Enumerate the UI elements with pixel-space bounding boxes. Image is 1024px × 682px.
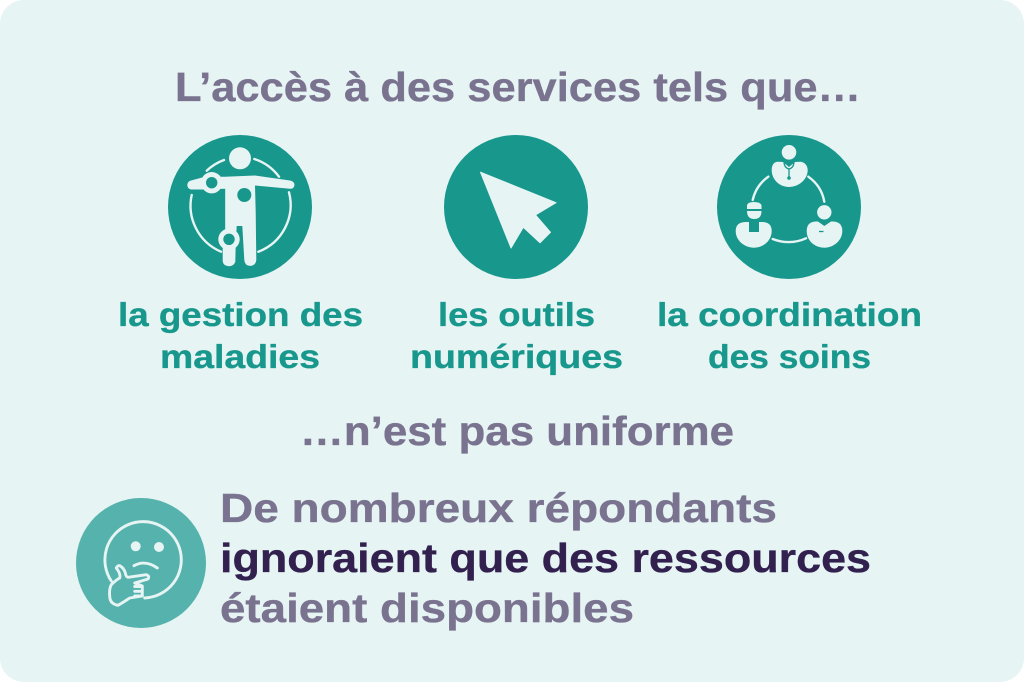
label: care coordination — [657, 296, 922, 375]
label: care coordination: des soins — [708, 338, 871, 375]
text block: respondents unaware: De nombreux répondants — [220, 485, 777, 531]
subheading: …n’est pas uniforme — [300, 408, 734, 454]
text block: respondents unaware: ignoraient que des ressources — [220, 535, 871, 581]
icon: thinking face — [76, 498, 206, 628]
icon: cursor — [444, 135, 588, 279]
label: disease management — [118, 296, 363, 375]
label: care coordination: la coordination — [657, 296, 922, 333]
label: digital tools — [410, 296, 623, 375]
label: disease management: la gestion des — [118, 296, 363, 333]
icon: care coordination — [717, 135, 861, 279]
label: digital tools: numériques — [410, 338, 623, 375]
text block: respondents unaware — [220, 485, 871, 631]
icon: disease management body — [168, 135, 312, 279]
title: L’accès à des services tels que… — [175, 64, 861, 110]
label: digital tools: les outils — [438, 296, 595, 333]
label: disease management: maladies — [160, 338, 320, 375]
text block: respondents unaware: étaient disponibles — [220, 585, 634, 631]
